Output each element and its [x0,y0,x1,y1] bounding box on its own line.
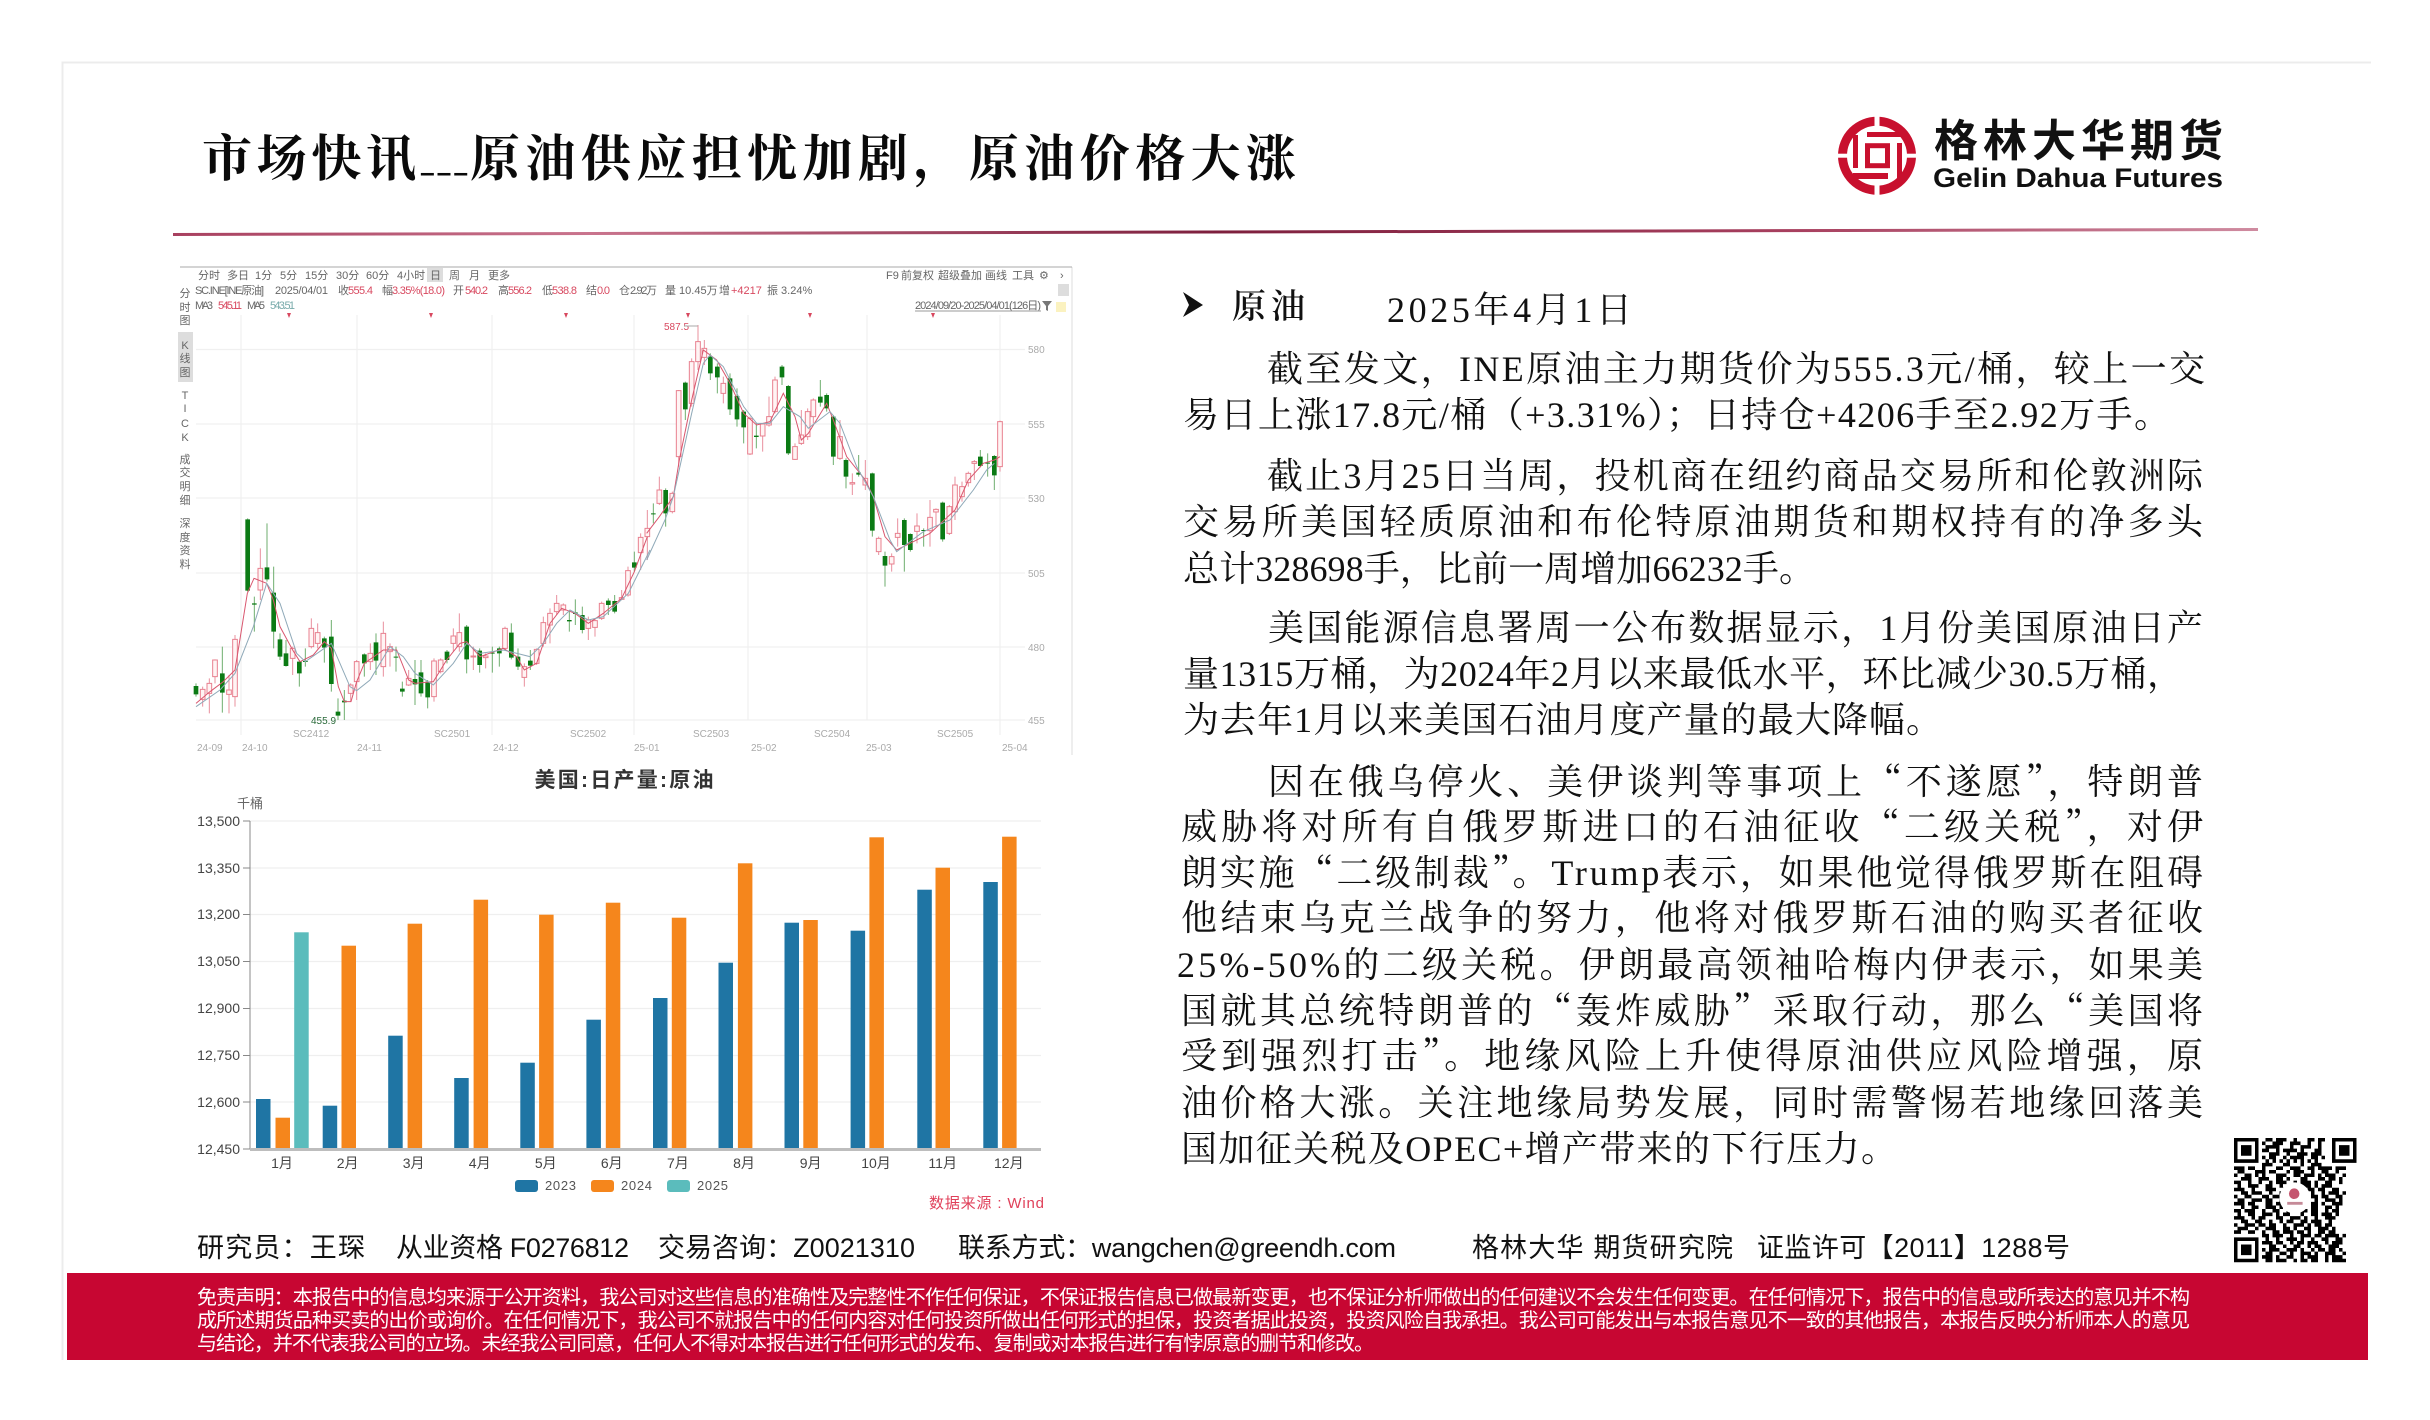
chart axis labels: SC2412 [293,729,330,740]
chart toolbar: 日 [430,270,441,282]
month labels [271,1155,1024,1171]
chart toolbar: 更多 [488,268,510,282]
chart toolbar: 前复权 [901,268,934,282]
paragraph: geopolitics: 国就其总统特朗普的“轰炸威胁”采取行动，那么“美国将 [1181,983,2203,1034]
chart side tabs: 时 [180,301,190,314]
chart side tabs: 深 [180,517,190,530]
chart toolbar: 2025/04/01 [275,285,328,297]
chart toolbar: 月 [469,270,480,282]
legend: 2024 [621,1178,652,1193]
chart toolbar: MA3 [195,300,213,312]
paragraph: geopolitics: 油价格大涨。关注地缘局势发展，同时需警惕若地缘回落美 [1181,1083,2203,1123]
chart toolbar: 2.92万 [630,285,657,297]
logo English name: Gelin Dahua Futures [1933,163,2223,193]
logo Chinese name: 格林大华期货 [1934,117,2223,166]
chart toolbar: 多日 [227,268,249,282]
chart axis labels: 25-01 [634,743,660,754]
chart axis labels: 25-04 [1002,743,1028,754]
chart side tabs: T [182,390,189,402]
chart side tabs: I [183,403,187,415]
chart toolbar: 工具 [1012,269,1034,282]
paragraph: INE price: 易日上涨17.8元/桶（+3.31%）；日持仓+4206手至2.92万手。 [1183,395,2170,435]
chart side tabs: 资 [180,544,190,557]
chart side tabs: 料 [180,557,190,571]
paragraph: INE price [1183,349,2205,435]
chart side tabs: K [181,432,189,444]
paragraph: geopolitics [1177,754,2203,1169]
unit label: 千桶 [237,796,263,811]
chart side tabs: 成 [180,453,190,466]
contact line [197,1233,2070,1263]
chart toolbar: 分时 [198,269,220,282]
month labels: 2月 [337,1155,358,1171]
chart toolbar: 540.2 [465,285,488,297]
chart toolbar: 15分 [305,269,328,282]
chart axis labels: SC2504 [814,729,851,740]
chart side tabs: 明 [180,480,190,493]
chart axis labels: 24-10 [242,743,268,754]
researcher: 研究员：王琛 [197,1233,365,1263]
chart toolbar: 超级叠加 [938,268,982,282]
2023 bars [256,882,998,1149]
chart axis labels: 555 [1028,420,1045,431]
body text [1177,349,2205,1169]
chart toolbar: 幅 [382,284,393,297]
chart side tabs: 分 [180,287,190,300]
chart toolbar: 556.2 [508,285,532,297]
chart toolbar: 低 [542,284,553,297]
paragraph: EIA output [1183,608,2203,740]
chart high and low labels: 587.5 [664,322,689,333]
paragraph: EIA output: 美国能源信息署周一公布数据显示，1月份美国原油日产 [1268,608,2203,648]
chart side tabs: K [181,340,189,352]
y axis labels: 13,050 [197,953,240,969]
chart toolbar: F9 [886,270,899,282]
email contact: 联系方式：wangchen@greendh.com [958,1233,1396,1263]
month labels: 12月 [994,1155,1024,1171]
paragraph: geopolitics: 因在俄乌停火、美伊谈判等事项上“不遂愿”，特朗普 [1268,754,2203,805]
month labels: 8月 [733,1155,755,1171]
chart toolbar: 仓 [619,283,630,297]
2025 bar [294,932,309,1149]
chart toolbar: 538.8 [552,285,577,297]
disclaimer band [67,1273,2368,1360]
chart toolbar: 量 10.45万 [665,284,718,297]
paragraph: net long positions [1183,456,2204,589]
paragraph: geopolitics: 他结束乌克兰战争的努力，他将对俄罗斯石油的购买者征收 [1181,898,2203,938]
chart toolbar: ⚙ [1039,270,1049,282]
paragraph: EIA output: 量1315万桶，为2024年2月以来最低水平，环比减少30.5万桶， [1183,654,2183,694]
icon: arrow bullet [1183,292,1203,317]
month labels: 5月 [535,1155,557,1171]
chart toolbar: SC.INE[INE原油] [195,283,264,297]
chart side tabs: 度 [180,530,190,544]
paragraph: geopolitics: 威胁将对所有自俄罗斯进口的石油征收“二级关税”，对伊 [1181,799,2203,850]
candles: Sep 2024 to Jan 2025 [194,510,650,720]
paragraph: geopolitics: 朗实施“二级制裁”。Trump表示，如果他觉得俄罗斯在阻碍 [1181,845,2203,896]
chart toolbar: 555.4 [348,285,373,297]
title: 原油供应担忧加剧，原油价格大涨 [470,131,1296,188]
paragraph: EIA output: 为去年1月以来美国石油月度产量的最大降幅。 [1183,700,1942,740]
paragraph: INE price: 截至发文，INE原油主力期货价为555.3元/桶，较上一交 [1267,349,2205,389]
chart toolbar: 高 [498,283,509,297]
chart axis labels: 25-03 [866,743,892,754]
data source: 数据来源 : Wind [929,1195,1044,1212]
title: --- [419,153,469,190]
month labels: 10月 [861,1155,891,1171]
candles: Jan 2025 to Apr 2025 [647,325,1002,587]
chart axis labels: SC2502 [570,729,607,740]
bar chart title: 美国:日产量:原油 [534,769,714,792]
bar chart: US crude daily output [197,769,1044,1212]
disclaimer band: 成所述期货品种买卖的出价或询价。在任何情况下，我公司不就报告中的任何内容对任何投资所做出任何形式的担保，投资者据此投资，投资风险自我承担。我公司可能发出与本报告意见不一致的其他报告，本报告反映分析师本人的意见 [197,1309,2190,1332]
disclaimer band: 与结论，并不代表我公司的立场。未经我公司同意，任何人不得对本报告进行任何形式的发布、复制或对本报告进行有悖原意的删节和修改。 [197,1332,1374,1355]
chart axis labels: 505 [1028,569,1045,580]
legend: 2025 [697,1178,728,1193]
chart toolbar: 4小时 [397,269,425,282]
chart axis labels: 530 [1028,494,1045,505]
chart toolbar: 3.35%(18.0) [392,285,445,297]
heading label: 原油 [1232,288,1305,326]
legend: 2023 [545,1178,576,1193]
month labels: 3月 [403,1155,424,1171]
chart toolbar: +4217 [731,285,762,297]
2024 bars [276,837,1017,1149]
licence number: 证监许可【2011】1288号 [1757,1233,2070,1263]
paragraph: geopolitics: 25%-50%的二级关税。伊朗最高领袖哈梅内伊表示，如果美 [1177,945,2203,985]
chart axis labels [197,345,1045,754]
chart side tabs: 图 [180,314,190,327]
chart toolbar: 振 3.24% [767,283,812,297]
candlestick chart panel [178,267,1072,755]
paragraph: geopolitics: 受到强烈打击”。地缘风险上升使得原油供应风险增强，原 [1181,1028,2203,1079]
advisory licence: 交易咨询：Z0021310 [658,1233,915,1263]
chart side tabs: 细 [180,494,190,507]
month labels: 7月 [667,1155,689,1171]
month labels: 1月 [271,1155,293,1171]
y axis labels: 12,450 [197,1141,240,1157]
logo: Gelin Dahua Futures [1836,114,2223,198]
month labels: 6月 [601,1155,623,1171]
chart axis labels: 580 [1028,345,1045,356]
chart toolbar: 1分 [255,269,272,282]
y axis labels: 12,600 [197,1094,240,1110]
y axis labels [197,813,240,1157]
chart markers [287,313,935,318]
chart toolbar: 60分 [366,269,389,282]
chart toolbar: 周 [449,269,460,282]
chart toolbar: 2024/09/20-2025/04/01(126日) [915,300,1041,312]
chart high and low labels [311,322,698,727]
chart side tabs [178,287,193,571]
qualification: 从业资格 F0276812 [396,1233,629,1263]
icon: logo mark [1836,114,1918,198]
chart axis labels: 24-11 [357,743,382,754]
month labels: 11月 [928,1155,957,1171]
y axis labels: 13,200 [197,906,240,922]
chart axis labels: 24-12 [493,743,519,754]
y axis labels: 13,350 [197,860,240,876]
paragraph: net long positions: 总计328698手，比前一周增加66232手。 [1183,549,1815,589]
chart axis labels: SC2503 [693,729,730,740]
chart toolbar: MA5 [247,300,265,312]
institute: 格林大华 期货研究院 [1472,1233,1733,1263]
chart toolbar: 545.11 [218,300,242,312]
chart toolbar [195,268,1069,312]
chart axis labels: SC2501 [434,729,471,740]
chart side tabs: 交 [180,465,190,479]
chart axis labels: 455 [1028,716,1045,727]
chart toolbar: 结 [586,284,597,297]
chart toolbar: 收 [338,283,349,297]
chart side tabs: 图 [180,366,190,379]
chart toolbar: 画线 [985,268,1007,282]
section heading [1183,288,1632,330]
heading date: 2025年4月1日 [1387,290,1632,330]
chart axis labels: 480 [1028,643,1045,654]
title: 市场快讯 [202,131,416,187]
chart toolbar: 30分 [336,269,359,282]
icon: QR code [2234,1138,2356,1262]
y axis labels: 13,500 [197,813,240,829]
paragraph: net long positions: 截止3月25日当周，投机商在纽约商品交易所和伦敦洲际 [1267,456,2204,496]
month labels: 4月 [469,1155,491,1171]
chart side tabs: C [181,418,189,430]
chart toolbar: 543.51 [270,300,295,312]
chart toolbar: › [1060,270,1064,282]
paragraph: geopolitics: 国加征关税及OPEC+增产带来的下行压力。 [1181,1129,1897,1169]
chart toolbar: 0.0 [597,285,610,297]
chart high and low labels: 455.9 [311,716,336,727]
month labels: 9月 [800,1155,821,1171]
paragraph: net long positions: 交易所美国轻质原油和布伦特原油期货和期权持有的净多头 [1183,502,2204,542]
chart axis labels: 25-02 [751,743,777,754]
chart side tabs: 线 [180,351,190,365]
y axis labels: 12,750 [197,1047,240,1063]
chart toolbar: 开 [453,285,464,297]
chart axis labels: SC2505 [937,729,974,740]
chart toolbar: 5分 [280,269,297,282]
chart axis labels: 24-09 [197,743,223,754]
chart toolbar: 增 [719,283,730,297]
y axis labels: 12,900 [197,1000,240,1016]
disclaimer band: 免责声明：本报告中的信息均来源于公开资料，我公司对这些信息的准确性及完整性不作任何保证，不保证报告信息已做最新变更，也不保证分析师做出的任何建议不会发生任何变更。在任何情况下，报告中的信息或所表达的意见并不构 [197,1286,2190,1309]
legend [515,1178,728,1193]
